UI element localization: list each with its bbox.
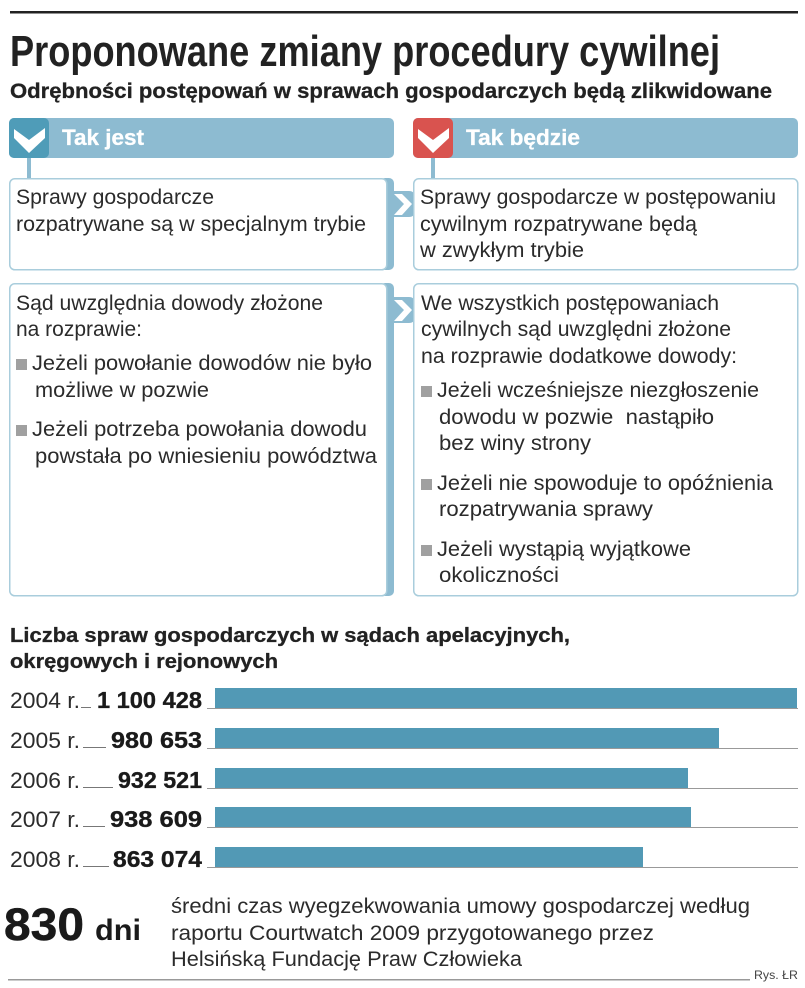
- bullet 1: Jeżeli powołanie dowodów nie było: [32, 351, 372, 375]
- panel: future rule box 2: cywilnych sąd uwzględni złożone: [421, 317, 731, 341]
- big number: [4, 899, 141, 950]
- panel: current rule box 1: [10, 178, 394, 270]
- panel: future rule box 1: [414, 179, 798, 270]
- row 2006: 2006 r.: [10, 768, 80, 793]
- panel: Tak będzie header: [413, 118, 798, 178]
- stat description: Helsińską Fundację Praw Człowieka: [171, 947, 522, 971]
- row 2007: 2007 r.: [10, 807, 80, 832]
- bullet 1: [16, 351, 372, 402]
- bullet 2: Jeżeli nie spowoduje to opóźnienia: [437, 471, 773, 495]
- panel: current rule box 1: rozpatrywane są w specjalnym trybie: [16, 212, 366, 236]
- bullet 2: rozpatrywania sprawy: [439, 497, 653, 521]
- row 2006: [10, 767, 798, 793]
- panel: Tak będzie header: Tak będzie: [466, 125, 580, 150]
- big number: dni: [95, 914, 141, 947]
- bullet 1: możliwe w pozwie: [35, 378, 209, 402]
- credit: Rys. ŁR: [754, 968, 798, 982]
- row 2007: 938 609: [110, 806, 202, 832]
- panel: future rule box 2: We wszystkich postępowaniach: [421, 291, 719, 315]
- bullet 1: Jeżeli wcześniejsze niezgłoszenie: [437, 378, 759, 402]
- panel: future rule box 1: w zwykłym trybie: [419, 238, 584, 262]
- row 2005: 980 653: [111, 727, 202, 753]
- bullet 1: dowodu w pozwie nastąpiło: [439, 405, 714, 429]
- arrow: box 1: [391, 191, 414, 217]
- panel: current rule box 1: Sprawy gospodarcze: [16, 185, 214, 209]
- row 2008: [10, 846, 798, 872]
- stat description: [171, 894, 750, 971]
- chart heading: okręgowych i rejonowych: [10, 651, 278, 673]
- panel: Tak jest header: Tak jest: [62, 125, 145, 150]
- panel: future rule box 2: [414, 284, 798, 596]
- chart heading: [10, 625, 570, 673]
- arrow: box 2: [391, 297, 414, 323]
- panel: Tak jest header: [9, 118, 394, 178]
- row 2008: 2008 r.: [10, 847, 80, 872]
- bullet 3: Jeżeli wystąpią wyjątkowe: [437, 537, 691, 561]
- row 2008: 863 074: [113, 846, 202, 872]
- chart heading: Liczba spraw gospodarczych w sądach apelacyjnych,: [10, 625, 570, 647]
- stat description: raportu Courtwatch 2009 przygotowanego przez: [171, 921, 654, 945]
- panel: current rule box 2: [10, 283, 394, 596]
- icon: check chevron red: [418, 128, 449, 153]
- row 2007: [10, 806, 798, 832]
- big number: 830: [4, 899, 84, 950]
- bullet 2: [421, 471, 773, 521]
- bullet 3: [421, 537, 691, 587]
- row 2006: 932 521: [118, 767, 202, 793]
- panel: current rule box 2: Sąd uwzględnia dowody złożone: [16, 291, 323, 315]
- panel: future rule box 1: Sprawy gospodarcze w postępowaniu: [420, 185, 776, 209]
- panel: current rule box 2: na rozprawie:: [16, 317, 142, 341]
- subtitle: Odrębności postępowań w sprawach gospodarczych będą zlikwidowane: [10, 80, 772, 103]
- row 2005: 2005 r.: [10, 728, 80, 753]
- row 2005: [10, 727, 798, 753]
- bullet 1: [421, 378, 759, 455]
- bullet 2: [16, 417, 377, 468]
- row 2004: [10, 687, 798, 713]
- bullet 1: bez winy strony: [439, 431, 591, 455]
- icon: check chevron blue: [14, 128, 45, 153]
- bullet 3: okoliczności: [439, 563, 559, 587]
- bar chart: [10, 687, 798, 872]
- bullet 2: powstała po wniesieniu powództwa: [35, 444, 377, 468]
- stat description: średni czas wyegzekwowania umowy gospodarczej według: [171, 894, 750, 918]
- panel: future rule box 2: na rozprawie dodatkowe dowody:: [421, 344, 737, 368]
- row 2004: 1 100 428: [97, 687, 202, 713]
- row 2004: 2004 r.: [10, 688, 80, 713]
- panel: future rule box 1: cywilnym rozpatrywane będą: [420, 212, 697, 236]
- bullet 2: Jeżeli potrzeba powołania dowodu: [32, 417, 367, 441]
